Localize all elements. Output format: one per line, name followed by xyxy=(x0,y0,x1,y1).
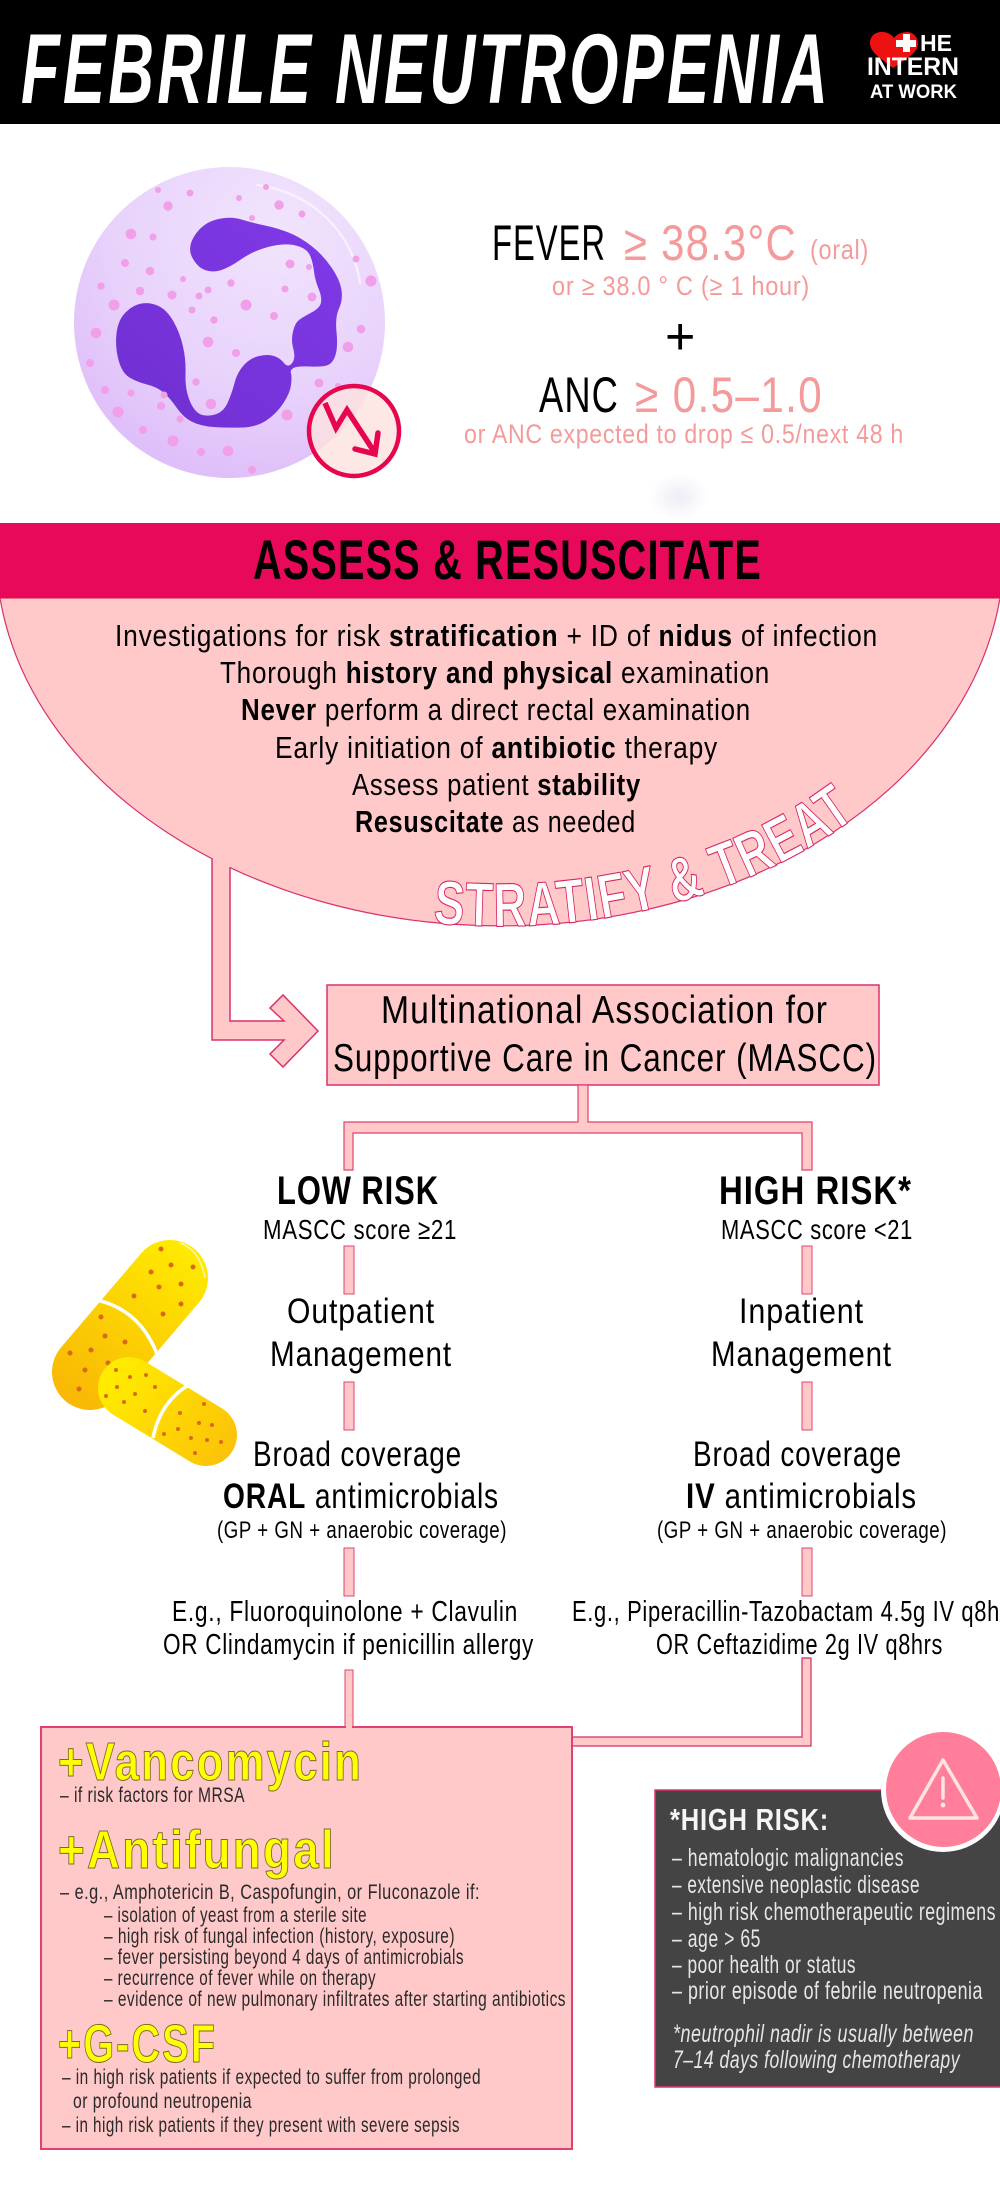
panel heading: ASSESS & RESUSCITATE xyxy=(253,528,762,591)
action list: Investigations for risk stratification + ID of nidus of infection xyxy=(115,618,878,653)
action list: Thorough history and physical examination xyxy=(220,655,770,690)
nucleus xyxy=(116,218,342,428)
low risk heading: LOW RISK xyxy=(277,1169,439,1213)
faint smudge xyxy=(649,473,709,521)
MASCC box xyxy=(327,985,879,1085)
low risk setting: Outpatient xyxy=(287,1292,435,1331)
antifungal criteria: – evidence of new pulmonary infiltrates after starting antibiotics xyxy=(104,1988,566,2011)
antifungal criteria xyxy=(60,1881,566,2011)
nadir note xyxy=(673,2020,974,2074)
action list: Never perform a direct rectal examination xyxy=(241,692,751,727)
heading: G-CSF: +G-CSF xyxy=(58,2014,217,2074)
icon: falling arrow badge xyxy=(309,386,399,476)
icon: neutrophil cell xyxy=(74,167,385,478)
panel: assess and resuscitate xyxy=(0,523,1000,927)
MASCC box: Multinational Association for xyxy=(381,989,828,1032)
high risk coverage: Broad coverage xyxy=(693,1435,902,1474)
antifungal criteria: – isolation of yeast from a sterile site xyxy=(104,1904,367,1927)
high risk setting: Inpatient xyxy=(739,1292,864,1331)
fever criteria: ≥ 38.3°C xyxy=(624,215,797,271)
low risk coverage: Broad coverage xyxy=(253,1435,462,1474)
antifungal criteria: – fever persisting beyond 4 days of antimicrobials xyxy=(104,1946,464,1969)
action list: Resuscitate as needed xyxy=(355,804,636,839)
low risk examples: E.g., Fluoroquinolone + Clavulin xyxy=(172,1596,518,1628)
panel: add-on therapies xyxy=(41,1725,572,2149)
risk factor list: – poor health or status xyxy=(672,1951,856,1979)
column: low risk xyxy=(163,1169,534,1661)
logo: The Intern at Work xyxy=(867,30,959,103)
antifungal criteria: – high risk of fungal infection (history, exposure) xyxy=(104,1925,455,1948)
ANC criteria: ≥ 0.5–1.0 xyxy=(635,367,823,423)
ANC criteria xyxy=(464,367,904,449)
logo: The Intern at Work: INTERN xyxy=(867,53,959,81)
header band xyxy=(0,0,1000,124)
antifungal criteria: – recurrence of fever while on therapy xyxy=(104,1967,376,1990)
action list xyxy=(115,618,878,839)
column: high risk: MASCC score <21 xyxy=(721,1214,913,1245)
ANC criteria: ANC xyxy=(539,367,619,423)
action list: Early initiation of antibiotic therapy xyxy=(275,730,718,765)
connectors into add-on box xyxy=(345,1658,811,1746)
column: low risk: Management xyxy=(270,1335,452,1374)
ANC criteria: or ANC expected to drop ≤ 0.5/next 48 h xyxy=(464,419,904,449)
heading: vancomycin: +Vancomycin xyxy=(58,1732,363,1792)
column: low risk: ORAL antimicrobials xyxy=(223,1477,499,1516)
column: high risk xyxy=(572,1169,1000,1661)
icon: warning badge xyxy=(881,1728,1000,1852)
action list: Assess patient stability xyxy=(352,767,641,802)
fever criteria xyxy=(492,215,869,301)
G-CSF criteria xyxy=(62,2066,481,2137)
panel: high risk definition xyxy=(655,1790,1000,2087)
column: high risk: IV antimicrobials xyxy=(686,1477,917,1516)
logo: The Intern at Work: HE xyxy=(920,30,952,56)
G-CSF criteria: – in high risk patients if they present with severe sepsis xyxy=(62,2114,460,2137)
G-CSF criteria: or profound neutropenia xyxy=(73,2090,252,2113)
MASCC box: Supportive Care in Cancer (MASCC) xyxy=(333,1037,877,1080)
fever criteria: (oral) xyxy=(810,234,869,265)
antifungal criteria: – e.g., Amphotericin B, Caspofungin, or Fluconazole if: xyxy=(60,1881,480,1904)
branch connector xyxy=(344,1085,812,1170)
risk factor list xyxy=(672,1844,996,2005)
risk factor list: – age > 65 xyxy=(672,1925,761,1953)
risk factor list: – hematologic malignancies xyxy=(672,1844,904,1872)
heading: antifungal: +Antifungal xyxy=(58,1820,336,1880)
granules xyxy=(86,184,376,474)
definition heading: *HIGH RISK: xyxy=(670,1802,829,1837)
curved label: stratify and treat: STRATIFY & TREAT xyxy=(434,782,848,927)
plus sign: + xyxy=(665,308,697,366)
column: high risk: Management xyxy=(711,1335,892,1374)
G-CSF criteria: – in high risk patients if expected to suffer from prolonged xyxy=(62,2066,481,2089)
logo: The Intern at Work: AT WORK xyxy=(870,82,957,103)
column: low risk: OR Clindamycin if penicillin allergy xyxy=(163,1629,534,1661)
icon: yellow capsules xyxy=(68,1243,223,1455)
fever criteria: FEVER xyxy=(492,215,606,271)
column: low risk: (GP + GN + anaerobic coverage) xyxy=(217,1517,507,1544)
high risk heading: HIGH RISK* xyxy=(719,1169,912,1213)
fever criteria: or ≥ 38.0 ° C (≥ 1 hour) xyxy=(552,271,810,301)
arrow to MASCC xyxy=(212,856,318,1067)
panel: add-on therapies: – if risk factors for MRSA xyxy=(60,1784,245,1807)
column: low risk: MASCC score ≥21 xyxy=(263,1214,457,1245)
